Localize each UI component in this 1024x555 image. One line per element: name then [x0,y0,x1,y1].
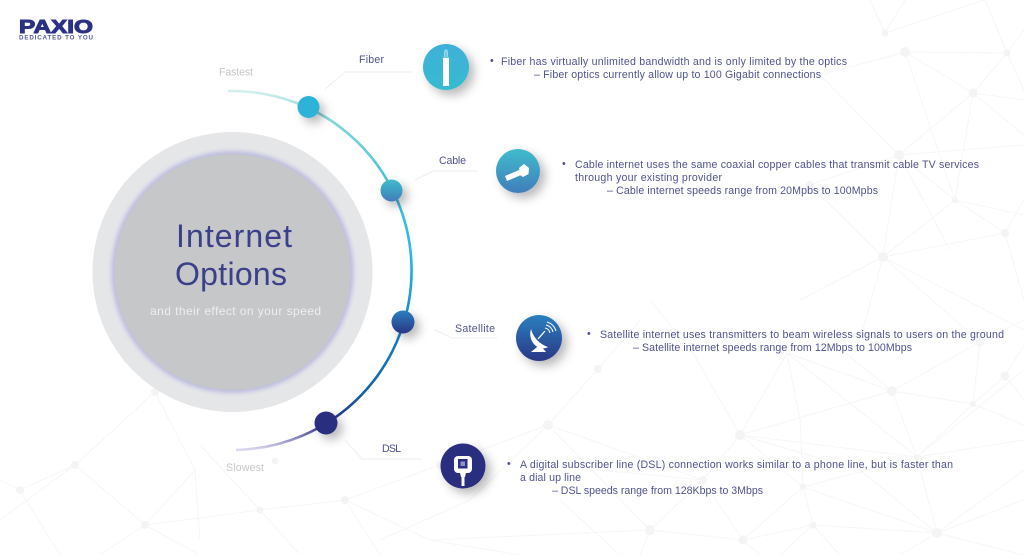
title: Internet Options [175,218,292,292]
icon: satellite dish [516,315,562,361]
subtitle: and their effect on your speed [150,304,321,318]
arc node: DSL [314,412,338,434]
text block: cable: Cable internet uses the same coaxial copper cables that transmit cable TV services [575,159,979,171]
label: Fiber: Fiber [359,54,384,66]
text block: DSL: – DSL speeds range from 128Kbps to 3Mbps [552,485,763,497]
logo: Paxio: DEDICATED TO YOU [19,34,94,42]
logo: Paxio [19,17,94,42]
text block: DSL: a dial up line [520,472,581,484]
connector: satellite [435,330,497,338]
title: Internet Options: Options [175,256,287,292]
central circle [92,132,372,412]
text block: satellite: Satellite internet uses transmitters to beam wireless signals to users on the ground [600,329,1004,341]
label: Satellite: Satellite [455,323,495,335]
arc node: fiber [298,96,320,118]
title: Internet Options: Internet [176,218,292,254]
text block: DSL: • [507,458,511,470]
text block: DSL [507,458,953,497]
text block: cable: through your existing provider [575,172,722,184]
icon: fiber cable [423,44,469,90]
text block: fiber: • [490,55,494,67]
speed arc [228,91,412,450]
text block: fiber [490,55,847,81]
text block: fiber: – Fiber optics currently allow up to 100 Gigabit connections [534,69,821,81]
connector: DSL [345,440,422,459]
text block: satellite [587,328,1004,354]
label: Fastest: Fastest [219,66,253,78]
text block: cable: • [562,158,566,170]
connector: fiber [325,72,412,89]
text block: fiber: Fiber has virtually unlimited bandwidth and is only limited by the optics [501,56,847,68]
arc node: cable [380,180,402,202]
connector: cable [415,171,478,180]
text block: satellite: – Satellite internet speeds range from 12Mbps to 100Mbps [633,342,912,354]
label: Cable: Cable [439,155,466,167]
icon: DSL connector [440,444,486,488]
arc node: satellite [392,310,414,334]
label: Slowest: Slowest [226,462,264,474]
icon: coaxial cable [496,149,540,193]
label: DSL: DSL [382,443,401,455]
logo: Paxio: PAXIO [19,17,93,37]
text block: DSL: A digital subscriber line (DSL) connection works similar to a phone line, but is faster than [520,459,953,471]
text block: cable [562,158,979,197]
text block: cable: – Cable internet speeds range from 20Mpbs to 100Mpbs [607,185,878,197]
text block: satellite: • [587,328,591,340]
